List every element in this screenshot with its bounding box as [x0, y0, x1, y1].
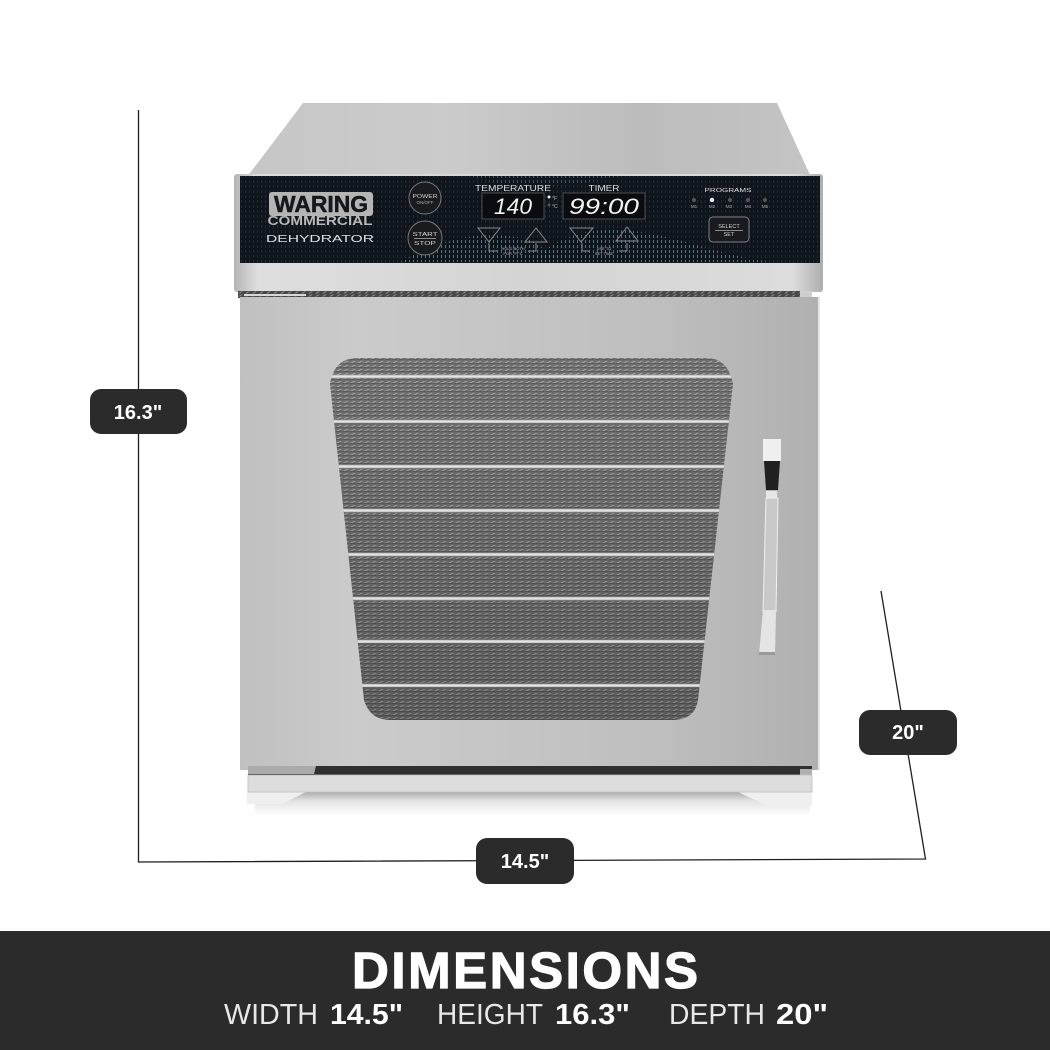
temperature display: °F	[552, 196, 557, 202]
programs: PROGRAMS	[704, 188, 752, 194]
label: depth	[859, 710, 957, 755]
door	[240, 297, 820, 770]
bottom rail	[248, 766, 812, 792]
dehydrator product	[234, 103, 823, 815]
label: height: 16.3"	[114, 402, 162, 424]
label: width: 14.5"	[501, 851, 549, 873]
select set button	[709, 217, 749, 242]
start stop button: START	[412, 232, 438, 238]
programs: M4	[745, 204, 752, 209]
base shadow	[255, 791, 810, 815]
feet	[247, 790, 812, 806]
logo	[266, 191, 374, 245]
programs: M5	[762, 204, 769, 209]
temperature arrows: FOR °F/°C	[503, 251, 523, 256]
temperature display	[475, 184, 558, 219]
top surface	[247, 103, 811, 177]
dimension summary: DEPTH	[669, 999, 765, 1031]
timer arrows: SET TIME	[595, 251, 613, 256]
select set button: SET	[724, 232, 735, 238]
timer arrows: USE TO	[597, 246, 611, 251]
dimension summary: 20"	[776, 999, 828, 1031]
door handle	[759, 439, 781, 655]
temperature display: 140	[494, 194, 533, 219]
dimension lines	[138, 110, 926, 862]
power button	[409, 182, 441, 214]
power button: POWER	[412, 194, 438, 200]
body band	[234, 174, 823, 292]
heading: DIMENSIONS	[352, 942, 698, 999]
footer band	[0, 931, 1050, 1050]
timer display: TIMER	[588, 184, 620, 193]
label: height	[90, 389, 187, 434]
temperature arrows	[478, 228, 547, 256]
label: depth: 20"	[892, 722, 924, 744]
dimension summary: WIDTH	[224, 999, 318, 1031]
dimension summary: 16.3"	[555, 999, 630, 1031]
select set button: SELECT	[718, 224, 740, 230]
programs: M1	[691, 204, 698, 209]
timer display: 99:00	[569, 194, 640, 219]
temperature display: °C	[552, 204, 558, 210]
logo: DEHYDRATOR	[266, 234, 374, 245]
programs: M3	[726, 204, 733, 209]
temperature arrows: HOLD BOTH	[501, 246, 525, 251]
start stop button: STOP	[414, 241, 436, 247]
dimension summary	[224, 999, 828, 1031]
start stop button	[408, 221, 442, 255]
rack rails	[325, 375, 737, 687]
dimension summary: 14.5"	[330, 999, 403, 1031]
power button: ON/OFF	[416, 200, 434, 205]
temperature display: TEMPERATURE	[475, 184, 551, 193]
programs	[691, 188, 769, 209]
logo: COMMERCIAL	[268, 213, 373, 228]
label: width	[476, 838, 574, 884]
window mesh	[325, 355, 737, 723]
vent strip	[238, 291, 812, 299]
dimension summary: HEIGHT	[437, 999, 543, 1031]
control panel	[240, 176, 820, 263]
timer arrows	[570, 227, 638, 256]
logo: WARING	[274, 191, 368, 217]
timer display	[563, 184, 645, 219]
programs: M2	[709, 204, 716, 209]
